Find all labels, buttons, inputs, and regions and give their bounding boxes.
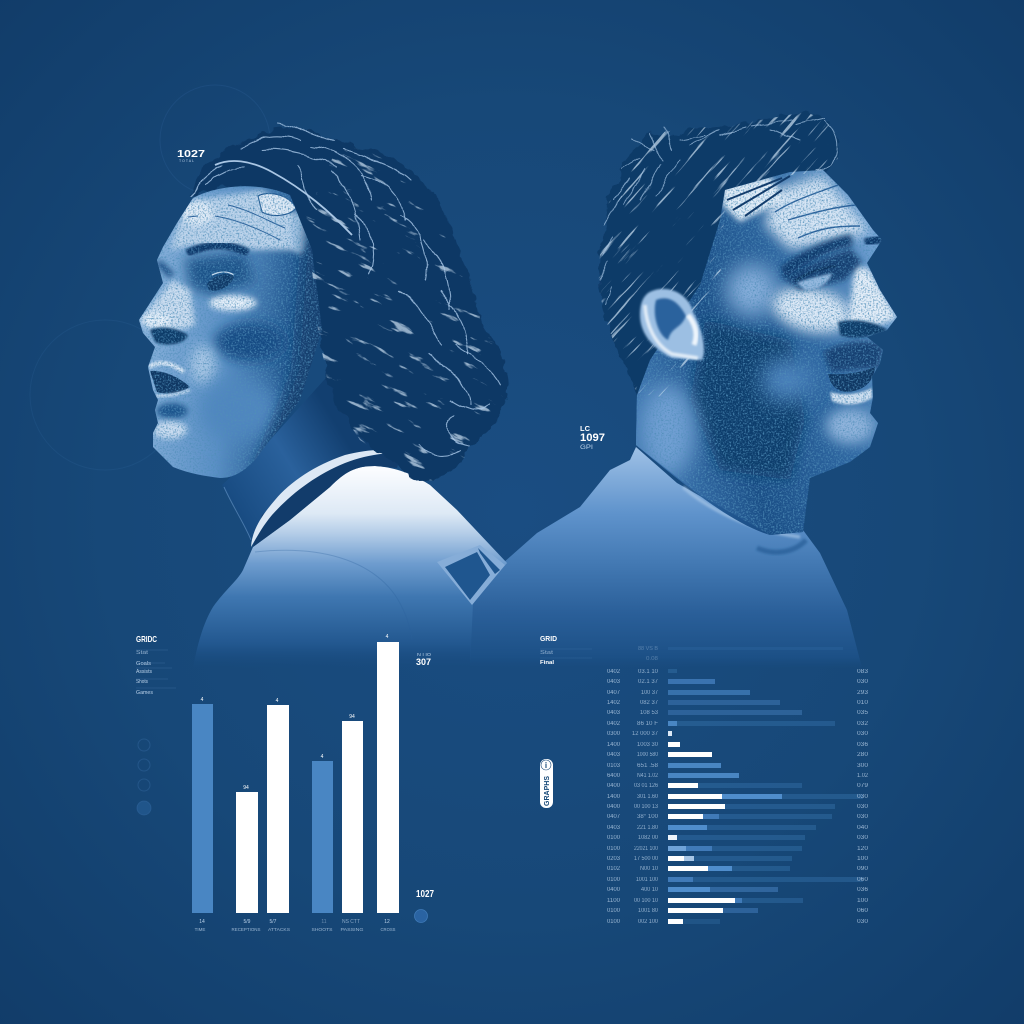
eye — [207, 274, 234, 291]
cheek highlight — [768, 280, 856, 340]
lower lip — [156, 390, 190, 396]
row 25: 100 — [857, 898, 869, 904]
stubble mid tone — [761, 358, 813, 402]
left player hair mass — [190, 128, 509, 482]
row 8: 86 10 F — [637, 721, 658, 727]
nose highlight — [140, 280, 195, 330]
row 19: 0100 — [607, 835, 621, 841]
chart legend heading: Games — [136, 690, 154, 696]
bar 4 — [312, 754, 333, 913]
forehead wrinkles — [775, 185, 860, 238]
eye socket — [185, 252, 255, 296]
row 19 — [607, 835, 869, 841]
row 18: 040 — [857, 825, 869, 831]
back of face shadow — [250, 214, 318, 464]
row 22: N00 10 — [640, 866, 659, 872]
right player neck — [636, 370, 810, 535]
row 12 — [607, 763, 869, 769]
row 13: 6400 — [607, 773, 621, 779]
row 15: 030 — [857, 794, 869, 800]
left player headband — [215, 161, 352, 235]
row 15: 301 1.60 — [637, 794, 659, 800]
row 12: 300 — [857, 763, 869, 769]
stat label: 1097 centre: GPI — [580, 445, 593, 451]
bar labels: 5/9 — [244, 919, 251, 925]
row 12: 651 .58 — [637, 763, 659, 769]
stat label: 1027: 1027 — [177, 148, 205, 160]
table legend heading — [540, 634, 592, 666]
row 27 — [607, 919, 869, 925]
row 6: 1402 — [607, 700, 621, 706]
row 6: 010 — [857, 700, 869, 706]
bar 5: 94 — [349, 714, 355, 720]
row 13 — [607, 773, 869, 779]
bar labels: NS CTT — [342, 919, 360, 925]
stat label: 1097 centre — [580, 426, 605, 451]
info pill — [540, 759, 553, 808]
mouth — [150, 371, 190, 394]
cheek highlight — [209, 295, 257, 311]
stat label: 1027 with circle icon — [414, 889, 434, 922]
nose highlight — [848, 265, 897, 325]
row 18: 221 1.80 — [637, 825, 659, 831]
row 2: 0.08 — [646, 656, 658, 662]
row 25: 1100 — [607, 898, 621, 904]
bar labels: 11 — [321, 919, 327, 925]
row 5: 293 — [857, 690, 869, 696]
stat label: 1027 — [177, 148, 205, 163]
row 13: N41 1.02 — [637, 773, 659, 779]
nostril shadow — [838, 320, 888, 338]
decorative faint circle, upper left — [160, 85, 270, 195]
stat label: 307: N I IO — [417, 652, 432, 657]
eye — [797, 273, 832, 290]
row 17: 030 — [857, 814, 869, 820]
nostril shadow — [150, 328, 188, 345]
stat label: 1097 centre: 1097 — [580, 432, 605, 444]
jaw stubble mid tone — [198, 378, 282, 442]
left player neck edge light — [224, 487, 251, 540]
eye socket — [780, 248, 862, 290]
left player jersey — [193, 466, 507, 668]
row 21: 17 500 00 — [634, 856, 659, 862]
row 24: 0400 — [607, 887, 621, 893]
row 5: 0407 — [607, 690, 621, 696]
row 4: 030 — [857, 679, 869, 685]
row 14: 03 01 126 — [634, 783, 659, 789]
bar labels: SHOOTS — [312, 927, 332, 932]
row 24 — [607, 887, 869, 893]
temple mid tone — [726, 264, 778, 316]
info pill: i — [545, 761, 547, 770]
row 13: 1.02 — [857, 773, 869, 779]
row 11: 0403 — [607, 752, 621, 758]
row 5 — [607, 690, 869, 696]
faint icon column — [137, 739, 151, 815]
panel: left bar chart — [136, 634, 434, 932]
row 23 — [607, 877, 869, 883]
stat label: 307 — [416, 652, 432, 667]
row 15: 1400 — [607, 794, 621, 800]
row 25: 00 100 10 — [634, 898, 659, 904]
bar 6 — [377, 634, 399, 913]
row 22 — [607, 866, 869, 872]
row 8 — [607, 721, 869, 727]
bar labels: TIME — [195, 927, 205, 932]
panel: right horizontal bar table — [540, 634, 869, 925]
cheek hollow shadow — [214, 322, 286, 362]
row 10: 1003 30 — [637, 742, 659, 748]
bar labels: 14 — [199, 919, 205, 925]
row 16: 00 100 13 — [634, 804, 659, 810]
row 23: 0100 — [607, 877, 621, 883]
bar 6: 4 — [386, 634, 389, 640]
portrait: right player — [459, 0, 1008, 668]
right player face — [636, 170, 897, 535]
row 3: 03.1 10 — [638, 669, 659, 675]
row 6 — [607, 700, 869, 706]
under lip shadow — [156, 403, 188, 419]
left player shoulder seam — [255, 550, 412, 640]
table legend heading: Final — [540, 660, 555, 666]
row 1: 88 VS B — [638, 646, 658, 652]
row 1 — [638, 646, 843, 652]
lower lip — [830, 388, 872, 404]
mouth — [828, 367, 875, 392]
bar 1: 4 — [201, 697, 204, 703]
neck highlight — [640, 384, 696, 476]
left player hair texture — [306, 148, 502, 481]
row 16: 0400 — [607, 804, 621, 810]
row 27: 0100 — [607, 919, 621, 925]
row 4: 02.1 37 — [638, 679, 659, 685]
right player hair mass — [599, 112, 838, 445]
row 21 — [607, 856, 869, 862]
row 23: 1001 100 — [636, 877, 659, 883]
bar 3: 4 — [276, 698, 279, 704]
chart legend heading: Assists — [136, 669, 152, 675]
row 21: 0203 — [607, 856, 621, 862]
row 9: 030 — [857, 731, 869, 737]
bar labels: CROSS — [380, 927, 396, 932]
row 9 — [607, 731, 869, 737]
row 17 — [607, 814, 869, 820]
chart legend heading: GRIDC — [136, 634, 157, 644]
table legend heading: Stat — [540, 650, 554, 656]
forehead highlight — [170, 190, 300, 250]
row 10: 036 — [857, 742, 869, 748]
moustache — [823, 341, 884, 372]
chart legend heading: Goals — [136, 661, 152, 667]
row 23: 060 — [857, 877, 869, 883]
row 27: 030 — [857, 919, 869, 925]
row 7: 035 — [857, 710, 869, 716]
left player collar — [251, 450, 402, 547]
row 26: 060 — [857, 908, 869, 914]
row 10: 1400 — [607, 742, 621, 748]
row 14 — [607, 783, 869, 789]
left player hair strands — [192, 123, 500, 455]
row 17: 0407 — [607, 814, 621, 820]
row 15 — [607, 794, 869, 800]
row 16 — [607, 804, 869, 810]
row 21: 100 — [857, 856, 869, 862]
row 25 — [607, 898, 869, 904]
row 22: 0102 — [607, 866, 621, 872]
row 24: 400 10 — [641, 887, 659, 893]
row 10 — [607, 742, 869, 748]
upper lip — [149, 363, 184, 372]
left player neck — [222, 340, 400, 545]
bar labels: PASSING — [340, 927, 364, 932]
row 18: 0403 — [607, 825, 621, 831]
stat label: 1027 with circle icon: 1027 — [416, 889, 434, 900]
row 20: 0100 — [607, 846, 621, 852]
bar 5 — [342, 714, 363, 913]
chart legend heading: Stat — [136, 650, 149, 656]
chart legend heading: Shots — [136, 679, 148, 685]
chart legend heading — [136, 634, 176, 696]
row 7 — [607, 710, 869, 716]
row 3: 0402 — [607, 669, 621, 675]
forehead highlight — [765, 175, 870, 250]
row 26: 0100 — [607, 908, 621, 914]
right player collar — [683, 487, 806, 552]
right player hair overlapping forehead — [727, 176, 790, 216]
table legend heading: GRID — [540, 634, 558, 643]
row 20 — [607, 846, 869, 852]
bar 2 — [236, 785, 258, 913]
row 22: 090 — [857, 866, 869, 872]
left player face — [139, 186, 322, 478]
bar 1 — [192, 697, 213, 913]
bar 3 — [267, 698, 289, 913]
row 27: 002 100 — [638, 919, 659, 925]
row 9: 0300 — [607, 731, 621, 737]
stat label: 1027: TOTAL — [179, 159, 194, 163]
chin highlight — [153, 421, 187, 439]
row 24: 036 — [857, 887, 869, 893]
bar labels: RECEPTIONS — [232, 927, 260, 932]
row 11: 280 — [857, 752, 869, 758]
row 26: 1001 80 — [638, 908, 659, 914]
right player hair strands — [600, 118, 837, 305]
row 3: 083 — [857, 669, 869, 675]
stat label: 1097 centre: LC — [580, 426, 590, 433]
decorative faint circle, mid left — [30, 320, 180, 470]
row 16: 030 — [857, 804, 869, 810]
row 19: 030 — [857, 835, 869, 841]
beard shadow — [690, 320, 805, 480]
left player sleeve badge — [437, 545, 505, 605]
row 9: 12 000 37 — [632, 731, 659, 737]
bar 4: 4 — [321, 754, 324, 760]
bar labels: 5/7 — [270, 919, 277, 925]
row 14: 0400 — [607, 783, 621, 789]
bar labels: ATTACKS — [268, 927, 290, 932]
row 8: 032 — [857, 721, 869, 727]
stat label: 307: 307 — [416, 657, 431, 667]
row 5: 100 37 — [641, 690, 659, 696]
bar labels — [195, 919, 396, 932]
row 20: 22021 100 — [634, 846, 659, 852]
portrait: left player — [139, 122, 508, 656]
row 20: 120 — [857, 846, 869, 852]
right player hair texture — [598, 112, 838, 396]
row 7: 0403 — [607, 710, 621, 716]
brow — [783, 240, 852, 272]
row 12: 0103 — [607, 763, 621, 769]
row 4 — [607, 679, 869, 685]
temple patch — [258, 193, 296, 215]
brow — [187, 245, 248, 253]
row 18 — [607, 825, 869, 831]
row 14: 079 — [857, 783, 869, 789]
info pill: GRAPHS — [544, 776, 551, 806]
row 26 — [607, 908, 869, 914]
row 8: 0402 — [607, 721, 621, 727]
row 4: 0403 — [607, 679, 621, 685]
forehead wrinkles — [188, 205, 285, 240]
row 19: 1082 00 — [638, 835, 659, 841]
right player jersey — [470, 447, 862, 668]
row 11 — [607, 752, 869, 758]
row 6: 082 37 — [640, 700, 659, 706]
row 11: 1000 580 — [637, 752, 659, 758]
right player ear — [640, 289, 704, 360]
row 7: 108 53 — [640, 710, 659, 716]
row 3 — [607, 669, 869, 675]
bar 2: 94 — [243, 785, 249, 791]
bar labels: 12 — [384, 919, 390, 925]
mid cheek light — [190, 345, 216, 385]
row 17: 38° 100 — [637, 814, 659, 820]
